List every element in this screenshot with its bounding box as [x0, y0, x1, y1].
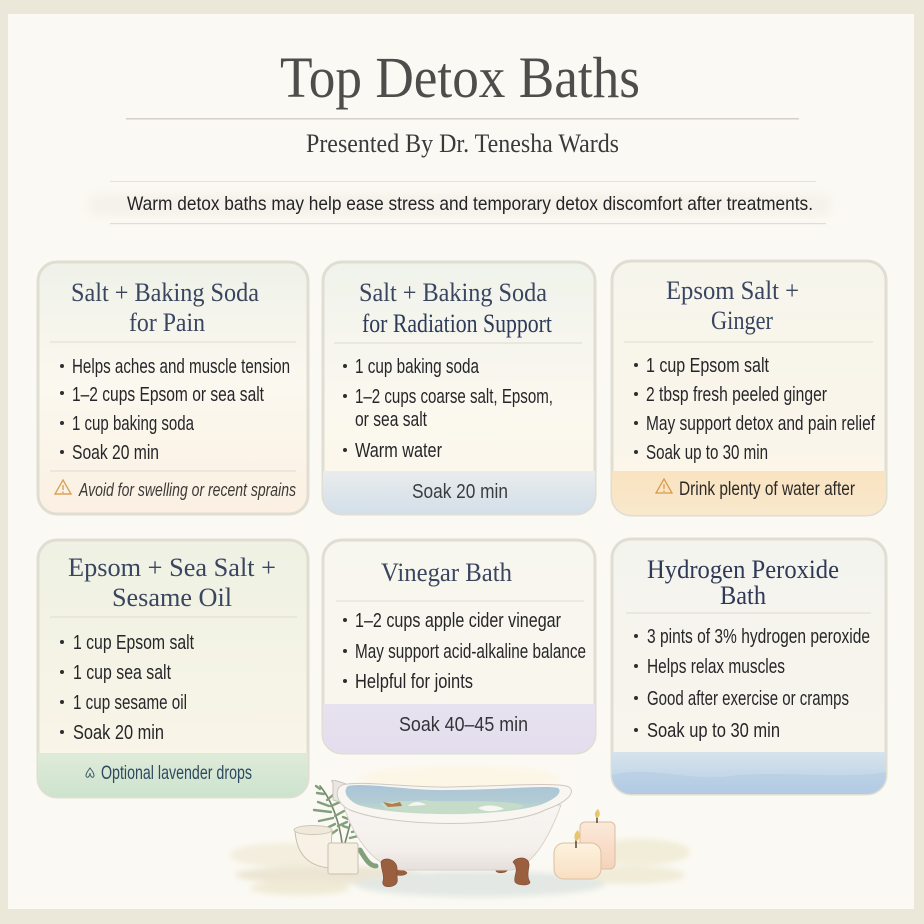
panel: salt + baking soda for pain [38, 262, 308, 514]
heading: for Radiation Support [362, 309, 553, 338]
ingredient list: Soak up to 30 min [646, 441, 768, 464]
ingredient list: Helpful for joints [355, 670, 473, 693]
ingredient list: May support acid-alkaline balance [355, 640, 586, 663]
heading: Ginger [711, 306, 773, 335]
heading: for Pain [129, 308, 205, 337]
icon: warning triangle [55, 480, 71, 494]
footer band: soak time [323, 471, 595, 514]
heading: Epsom + Sea Salt + [68, 553, 276, 582]
footer band: hydration note: Drink plenty of water after [679, 478, 855, 500]
panel: hydrogen peroxide bath [612, 539, 886, 794]
heading: Salt + Baking Soda [71, 278, 259, 307]
ingredient list: 1–2 cups apple cider vinegar [355, 609, 561, 632]
tub front feet [381, 858, 530, 887]
heading: Salt + Baking Soda [359, 278, 547, 307]
ingredient list [634, 625, 870, 742]
ingredient list [60, 631, 194, 744]
ingredient list: Warm water [355, 439, 442, 462]
tub body [343, 803, 561, 870]
heading [666, 276, 799, 335]
illustration: bathtub scene [230, 766, 690, 897]
footer band: hydration note [612, 471, 886, 515]
ingredient list: Soak 20 min [73, 721, 164, 744]
panel: vinegar bath [323, 540, 595, 753]
heading [359, 278, 553, 338]
ingredient list: 1 cup sesame oil [73, 691, 187, 714]
title: Top Detox Baths [280, 45, 640, 110]
panel: epsom salt + ginger [612, 261, 886, 515]
ingredient list [634, 354, 875, 464]
ingredient list [343, 355, 553, 462]
heading: Epsom Salt + [666, 276, 799, 305]
panel: epsom + sea salt + sesame oil [38, 540, 308, 797]
intro banner [88, 181, 832, 224]
ingredient list: 1 cup sea salt [73, 661, 171, 684]
ingredient list: 1 cup baking soda [72, 412, 194, 435]
ingredient list: 1 cup Epsom salt [646, 354, 769, 377]
heading [647, 555, 839, 610]
bowl [295, 830, 332, 868]
ingredient list [343, 609, 586, 693]
footer band: soak time [323, 704, 595, 753]
plant [314, 786, 376, 866]
footer band: lavender option: Optional lavender drops [101, 762, 252, 784]
heading: Bath [720, 581, 766, 610]
footer band: water wash [612, 752, 886, 794]
heading: Sesame Oil [112, 583, 232, 612]
footer band: soak time: Soak 20 min [412, 480, 508, 503]
ingredient list: Soak up to 30 min [647, 719, 780, 742]
ingredient list: 1 cup baking soda [355, 355, 479, 378]
tub back feet [394, 868, 508, 875]
heading: Vinegar Bath [381, 558, 512, 587]
ingredient list: Helps aches and muscle tension [72, 355, 290, 378]
ingredient list [60, 355, 290, 464]
heading [68, 553, 276, 612]
tub rim [332, 780, 346, 802]
intro banner: Warm detox baths may help ease stress and temporary detox discomfort after treatments. [127, 193, 813, 215]
heading: Hydrogen Peroxide [647, 555, 839, 584]
ingredient list: 1 cup Epsom salt [73, 631, 194, 654]
subtitle: Presented By Dr. Tenesha Wards [306, 129, 619, 158]
candles [554, 809, 615, 879]
footer band: soak time: Soak 40–45 min [399, 713, 528, 736]
panel: salt + baking soda for radiation support [323, 262, 595, 514]
stone pot [328, 843, 358, 874]
watercolor ground wash [230, 766, 690, 897]
ingredient list: 2 tbsp fresh peeled ginger [646, 383, 827, 406]
ingredient list: 1–2 cups Epsom or sea salt [72, 383, 264, 406]
heading [71, 278, 259, 337]
ingredient list: Soak 20 min [72, 441, 159, 464]
ingredient list: Helps relax muscles [647, 655, 785, 678]
ingredient list: 1–2 cups coarse salt, Epsom, [355, 385, 553, 408]
caution note: Avoid for swelling or recent sprains [78, 480, 296, 500]
ingredient list: or sea salt [355, 408, 427, 431]
footer band: lavender option [38, 753, 308, 797]
water [346, 785, 560, 814]
ingredient list: Good after exercise or cramps [647, 687, 849, 710]
